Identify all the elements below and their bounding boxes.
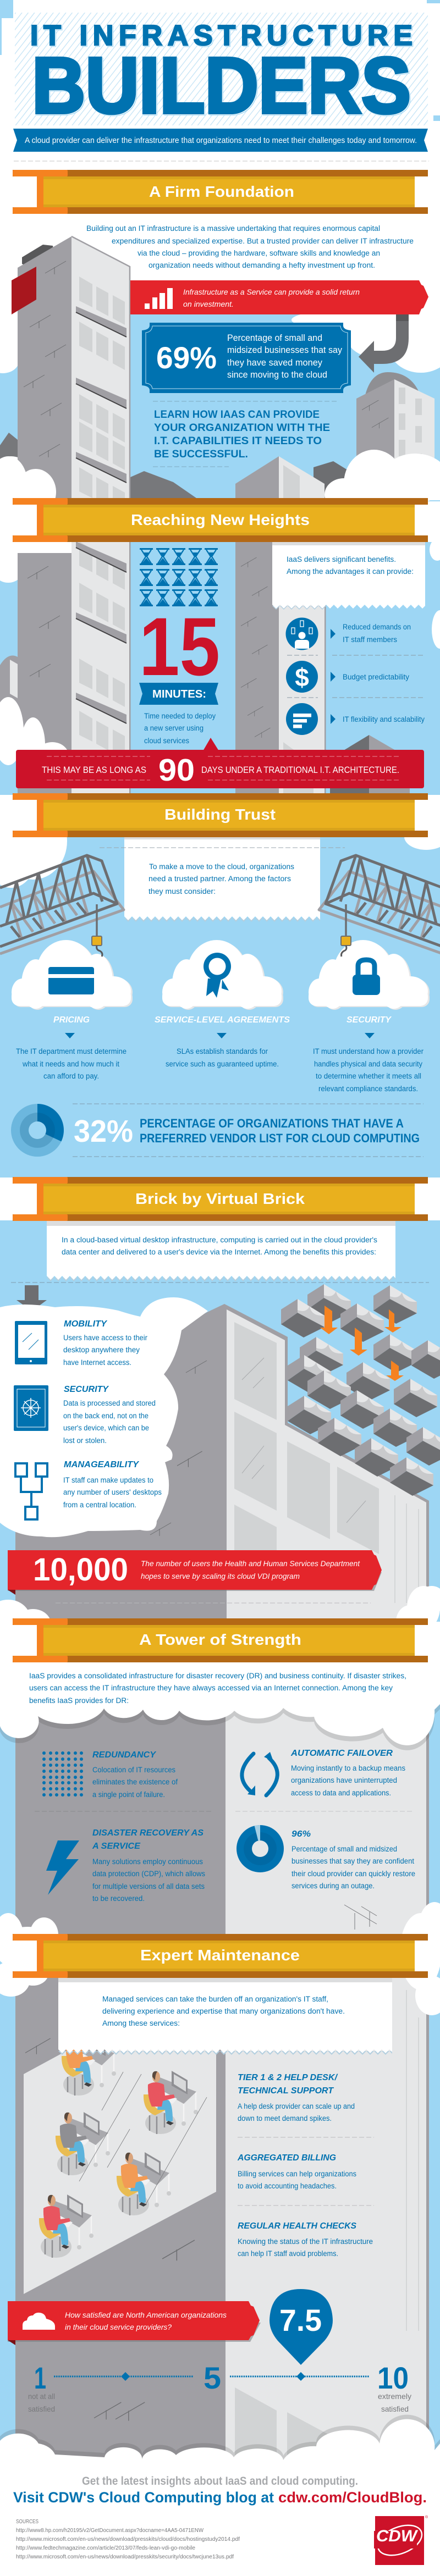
- benefit: 96%: [237, 1825, 415, 1890]
- factor: security: relevant compliance standards.: [318, 1085, 418, 1093]
- factor: security: to determine whether it meets all: [316, 1072, 421, 1080]
- foreground clouds over tower base: [0, 456, 56, 515]
- benefit: disaster recovery as a service: A SERVICE: [92, 1842, 141, 1851]
- section 3 background: [0, 803, 440, 1178]
- section 5 and 6 building: [0, 1662, 440, 2464]
- tower: upper: [18, 236, 130, 516]
- foreground clouds section 1: [0, 450, 440, 518]
- benefit: automatic failover: [242, 1749, 405, 1797]
- small building right: [330, 735, 410, 793]
- sources: http://www.fedtechmagazine.com/article/2013/07/feds-lean-vdi-go-mobile: [16, 2545, 195, 2551]
- benefit: security: [14, 1385, 156, 1445]
- benefits list: IT flexibility and scalability: [343, 715, 425, 723]
- red band: 90 days: DAYS UNDER A TRADITIONAL I.T. ARCHITECTURE.: [201, 765, 399, 775]
- paper: benefits intro: Among the advantages it can provide:: [287, 567, 414, 576]
- stat box: 69%: since moving to the cloud: [227, 370, 327, 380]
- service: help desk: down to meet demand spikes.: [238, 2114, 332, 2122]
- top cloud: tower of strength: users can access the IT infrastructure they have always accessed via an Internet connection. Among the key: [29, 1684, 393, 1692]
- benefit: disaster recovery as a service: DISASTER RECOVERY AS: [92, 1828, 204, 1838]
- heading: Expert Maintenance: Expert Maintenance: [140, 1947, 300, 1964]
- footer call to action: cdw.com/CloudBlog.: [278, 2489, 427, 2506]
- white cloud: VDI benefits: [0, 1297, 208, 1537]
- red ribbon: 10,000: hopes to serve by scaling its cloud VDI program: [141, 1572, 300, 1580]
- CDW logo: CDW: [376, 2527, 419, 2545]
- arrow down: [16, 1285, 47, 1311]
- heading: Brick by Virtual Brick: Brick by Virtual Brick: [135, 1190, 305, 1207]
- benefit: redundancy: [42, 1750, 178, 1799]
- sources: http://www8.hp.com/h20195/v2/GetDocument.aspx?docname=4AA5-0471ENW: [16, 2528, 204, 2534]
- benefit: disaster recovery as a service: to be recovered.: [92, 1894, 145, 1903]
- paper: managed services: Among these services:: [102, 2019, 180, 2027]
- red ribbon: satisfaction question: [8, 2301, 261, 2345]
- benefit: automatic failover: organizations have uninterrupted: [291, 1776, 397, 1784]
- benefit: 96%: Percentage of small and midsized: [292, 1845, 397, 1853]
- benefit: manageability: from a central location.: [63, 1501, 136, 1509]
- top cloud: tower of strength: benefits IaaS provides for DR:: [29, 1696, 129, 1705]
- crane right: [319, 855, 440, 954]
- benefit: 96%: their cloud provider can quickly restore: [292, 1870, 415, 1878]
- paper: managed services: delivering experience and expertise that many organizations don't have.: [102, 2007, 345, 2015]
- section 1 intro text: [86, 224, 414, 269]
- cloud: security: [309, 940, 430, 1010]
- stat box: 69%: [142, 323, 351, 393]
- heading: Reaching New Heights: Reaching New Heights: [131, 511, 310, 528]
- crane left: [0, 855, 124, 954]
- heading: Reaching New Heights: [13, 498, 428, 542]
- icon: circular arrows: [242, 1752, 277, 1795]
- crane hooks: [92, 904, 351, 957]
- red flag on tower: [12, 267, 36, 314]
- section 1 intro text: via the cloud – providing the hardware, software skills and knowledge an: [138, 249, 380, 257]
- red ribbon: 10,000: 10,000: [33, 1552, 128, 1588]
- benefits list: [286, 618, 425, 735]
- building column: [235, 542, 326, 793]
- donut chart: 96%: [237, 1825, 284, 1872]
- factor: service-level agreements: SERVICE-LEVEL AGREEMENTS: [155, 1015, 290, 1025]
- benefit: manageability: MANAGEABILITY: [64, 1460, 139, 1469]
- benefit: disaster recovery as a service: Many solutions employ continuous: [92, 1858, 203, 1866]
- factor: service-level agreements: [155, 1015, 290, 1068]
- falling cubes: [281, 1284, 440, 1496]
- footer call to action: Visit CDW's Cloud Computing blog at: [13, 2489, 274, 2506]
- factor: security: handles physical and data security: [314, 1060, 422, 1068]
- CDW logo: ®: [425, 2515, 428, 2519]
- paper: VDI intro: In a cloud-based virtual desktop infrastructure, computing is carried out in the cloud provider's: [62, 1236, 377, 1244]
- paper: trust intro: they must consider:: [148, 887, 216, 895]
- stat: 15 minutes: [139, 600, 220, 745]
- benefit: manageability: [15, 1460, 162, 1519]
- section 1 intro text: Building out an IT infrastructure is a massive undertaking that requires enormous capital: [86, 224, 380, 233]
- benefit: disaster recovery as a service: for multiple versions of all data sets: [92, 1882, 205, 1890]
- satisfaction scale: 1: [34, 2361, 46, 2395]
- paper: benefits intro: IaaS delivers significant benefits.: [287, 555, 396, 563]
- factor: pricing: what it needs and how much it: [22, 1060, 119, 1068]
- paper: trust intro: To make a move to the cloud, organizations: [149, 863, 294, 871]
- paper: VDI intro: data center and delivered to a user's device via the Internet. Among the benefits this provides:: [62, 1248, 376, 1256]
- background buildings: [0, 372, 435, 498]
- cloud: service-level agreements: [162, 940, 283, 1010]
- clouds around beam 6: [0, 1902, 440, 2015]
- red ribbon: 10,000: The number of users the Health and Human Services Department: [141, 1559, 360, 1568]
- heading: A Tower of Strength: A Tower of Strength: [139, 1631, 301, 1648]
- arrow: ribbon to stat: [359, 314, 409, 373]
- factor: service-level agreements: service such as guaranteed uptime.: [166, 1060, 279, 1068]
- benefit: mobility: have Internet access.: [63, 1358, 131, 1367]
- paper: managed services: Managed services can take the burden off an organization's IT staff,: [102, 1995, 328, 2003]
- sources: http://www.microsoft.com/en-us/news/download/presskits/security/docs/twcjune13us.pdf: [16, 2554, 234, 2560]
- service: regular health checks: REGULAR HEALTH CHECKS: [238, 2221, 356, 2231]
- footer call to action: Get the latest insights about IaaS and cloud computing.: [82, 2475, 358, 2487]
- stat: 32% text: 32%: [74, 1114, 133, 1149]
- paper: trust intro: [124, 837, 320, 922]
- top cloud: tower of strength: [0, 1655, 440, 1750]
- benefit: security: lost or stolen.: [63, 1436, 107, 1445]
- worker: orange shirt beard: [117, 2152, 171, 2215]
- satisfaction scale: satisfied: [381, 2404, 409, 2413]
- satisfaction scale: [28, 2361, 411, 2413]
- top cloud: tower of strength: IaaS provides a consolidated infrastructure for disaster recovery (DR) and business continuity. If disaster strikes,: [29, 1672, 406, 1680]
- paper: trust intro: need a trusted partner. Among the factors: [148, 875, 291, 883]
- factor: security: [313, 1015, 424, 1093]
- benefit: mobility: desktop anywhere they: [63, 1346, 140, 1354]
- benefit: security: SECURITY: [64, 1385, 109, 1394]
- service: regular health checks: Knowing the status of the IT infrastructure: [238, 2237, 373, 2246]
- sources: SOURCES: [16, 2519, 38, 2525]
- icon: dollar: [286, 661, 318, 693]
- service: aggregated billing: to avoid accounting headaches.: [238, 2182, 337, 2190]
- benefit: 96%: businesses that say they are confident: [292, 1857, 414, 1865]
- factor: service-level agreements: SLAs establish standards for: [177, 1047, 268, 1055]
- factor: pricing: [16, 1015, 127, 1080]
- sources: http://www.microsoft.com/en-us/news/download/presskits/cloud/docs/hostingstudy2014.pdf: [16, 2536, 240, 2542]
- red ribbon: satisfaction question: in their cloud service providers?: [65, 2323, 172, 2331]
- score pin: 7.5: [270, 2289, 333, 2365]
- section 4 background: [0, 1220, 440, 1622]
- paper: managed services: [58, 1978, 392, 2055]
- stat: 15 minutes: a new server using: [144, 724, 204, 732]
- worker: red shirt: [144, 2071, 198, 2134]
- service: aggregated billing: [237, 2153, 356, 2190]
- tower: lower: [18, 541, 131, 793]
- benefit: automatic failover: access to data and applications.: [291, 1789, 391, 1797]
- stat: 32% pie chart: [11, 1104, 64, 1157]
- orange arrows: [320, 1306, 404, 1381]
- worker: woman: [39, 2194, 94, 2258]
- benefit: 96%: 96%: [292, 1829, 311, 1839]
- call to action heading: YOUR ORGANIZATION WITH THE: [154, 422, 330, 434]
- paper: VDI intro: [47, 1221, 395, 1281]
- heading: A Tower of Strength: [13, 1618, 428, 1662]
- office floor with workers: [24, 2032, 226, 2294]
- icon: dollar: $: [295, 663, 309, 692]
- benefit: automatic failover: Moving instantly to a backup means: [291, 1764, 405, 1772]
- stat: 15 minutes: 15: [139, 600, 220, 693]
- icon: bars: [145, 288, 173, 309]
- service: help desk: TECHNICAL SUPPORT: [238, 2086, 334, 2096]
- icon: flexibility bars: [286, 703, 318, 735]
- paper: benefits intro: [272, 542, 425, 610]
- call to action heading: LEARN HOW IAAS CAN PROVIDE: [154, 409, 320, 421]
- satisfaction scale: satisfied: [28, 2404, 55, 2413]
- red ribbon: ROI: [130, 280, 428, 314]
- service: help desk: A help desk provider can scale up and: [238, 2102, 355, 2110]
- title: BUILDERS: [32, 41, 411, 130]
- stat: 32% text: PERCENTAGE OF ORGANIZATIONS THAT HAVE A: [140, 1116, 404, 1130]
- stat: 32% text: [74, 1114, 420, 1149]
- bottom cloud: [0, 2415, 440, 2474]
- benefit: mobility: MOBILITY: [64, 1319, 107, 1329]
- red band: 90 days: [16, 738, 424, 788]
- score pin: 7.5: 7.5: [279, 2303, 322, 2337]
- clouds above beam: [0, 1586, 440, 1640]
- service: help desk: [238, 2073, 355, 2122]
- factor: security: IT must understand how a provider: [313, 1047, 424, 1055]
- sources: [16, 2519, 240, 2560]
- benefits list: Budget predictability: [343, 673, 409, 681]
- service: regular health checks: can help IT staff avoid problems.: [238, 2249, 338, 2258]
- stat: 15 minutes: MINUTES:: [152, 688, 206, 700]
- benefit: disaster recovery as a service: [46, 1828, 205, 1903]
- stat box: 69%: midsized businesses that say: [227, 345, 343, 355]
- icon grid: hourglasses: [140, 549, 218, 606]
- red ribbon: satisfaction question: How satisfied are North American organizations: [65, 2310, 227, 2319]
- foreground cloud lower left: [0, 697, 69, 772]
- clouds with icons: [12, 940, 430, 1010]
- benefit: redundancy: Colocation of IT resources: [92, 1766, 175, 1774]
- factor: security: SECURITY: [346, 1015, 392, 1025]
- heading: Expert Maintenance: [13, 1934, 428, 1978]
- satisfaction scale: 10: [377, 2361, 409, 2395]
- stat: 15 minutes: Time needed to deploy: [144, 712, 216, 720]
- stat: 15 minutes: cloud services: [144, 737, 189, 745]
- icon: cloud: [23, 2313, 55, 2330]
- icon: dot grid: [42, 1751, 83, 1796]
- heading: Building Trust: Building Trust: [164, 806, 276, 823]
- benefit: automatic failover: AUTOMATIC FAILOVER: [290, 1749, 393, 1758]
- section background: sky 1: [0, 308, 440, 501]
- heading: Building Trust: [13, 793, 428, 837]
- title: IT INFRASTRUCTURE: [30, 20, 413, 52]
- benefit: security: on the back end, not on the: [63, 1412, 148, 1420]
- hatched title panel: [15, 13, 428, 125]
- footer call to action: [13, 2475, 427, 2506]
- benefit: redundancy: a single point of failure.: [92, 1790, 165, 1799]
- service: help desk: TIER 1 & 2 HELP DESK/: [238, 2073, 338, 2082]
- worker: gray shirt: [56, 2112, 110, 2175]
- benefit: security: user's device, which can be: [63, 1424, 149, 1432]
- factor: pricing: can afford to pay.: [43, 1072, 99, 1080]
- factor: pricing: The IT department must determine: [16, 1047, 127, 1055]
- satisfaction scale: extremely: [378, 2392, 411, 2401]
- satisfaction scale: not at all: [28, 2392, 55, 2401]
- benefits list: Reduced demands on: [343, 623, 411, 631]
- CDW logo: [373, 2515, 428, 2565]
- benefit: manageability: IT staff can make updates to: [63, 1476, 153, 1484]
- icon: lightning bolt: [46, 1840, 79, 1895]
- call to action heading: BE SUCCESSFUL.: [154, 449, 248, 460]
- benefit: manageability: any number of users' desktops: [63, 1488, 162, 1496]
- service: regular health checks: [238, 2221, 373, 2258]
- header background clouds: [0, 0, 440, 121]
- section 1 intro text: expenditures and specialized expertise. But a trusted provider can deliver IT infrastructure: [112, 237, 414, 245]
- cloud: pricing: [12, 940, 133, 1010]
- call to action heading: I.T. CAPABILITIES IT NEEDS TO: [154, 435, 322, 447]
- satisfaction scale: 5: [204, 2361, 221, 2395]
- benefit: security: Data is processed and stored: [63, 1399, 156, 1407]
- benefit: redundancy: eliminates the existence of: [92, 1778, 178, 1786]
- subtitle ribbon: [13, 129, 428, 152]
- big building: [15, 1304, 429, 1618]
- red band: 90 days: 90: [158, 753, 195, 788]
- heading: Brick by Virtual Brick: [13, 1177, 428, 1221]
- stat box: 69%: Percentage of small and: [227, 333, 322, 343]
- service: aggregated billing: AGGREGATED BILLING: [237, 2153, 336, 2163]
- benefit: 96%: services during an outage.: [292, 1882, 375, 1890]
- benefit: disaster recovery as a service: data protection (CDP), which allows: [92, 1870, 205, 1878]
- red ribbon: ROI: Infrastructure as a Service can provide a solid return: [183, 288, 360, 296]
- benefit: mobility: [15, 1319, 147, 1367]
- benefit: mobility: Users have access to their: [63, 1334, 147, 1342]
- benefits list: IT staff members: [343, 635, 397, 644]
- red ribbon: ROI: on investment.: [183, 300, 234, 308]
- heading: A Firm Foundation: [13, 170, 428, 214]
- red band: 90 days: THIS MAY BE AS LONG AS: [42, 765, 146, 775]
- heading: A Firm Foundation: A Firm Foundation: [149, 183, 294, 200]
- factor: pricing: PRICING: [53, 1015, 90, 1025]
- benefit: redundancy: REDUNDANCY: [92, 1750, 156, 1760]
- icon: people and devices: [286, 618, 318, 650]
- stat box: 69%: they have saved money: [227, 358, 323, 368]
- section 2 background: [0, 539, 440, 795]
- stat box: 69%: 69%: [156, 340, 217, 375]
- worker: orange shirt: [62, 2032, 116, 2096]
- subtitle ribbon: A cloud provider can deliver the infrastructure that organizations need to meet their challenges today and tomorrow.: [25, 136, 417, 145]
- red ribbon: 10,000: [8, 1550, 382, 1595]
- service: aggregated billing: Billing services can help organizations: [238, 2170, 356, 2178]
- section 1 intro text: organization needs without demanding a hefty investment up front.: [148, 261, 375, 269]
- call to action heading: [154, 409, 330, 460]
